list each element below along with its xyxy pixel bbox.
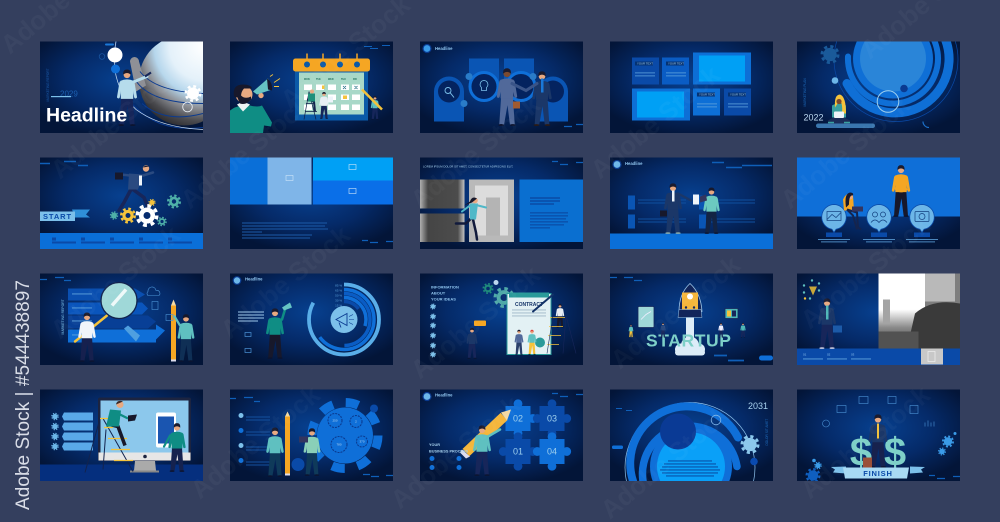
dashes (40, 278, 71, 280)
puzzle numbers (513, 414, 557, 456)
watermarks: Adobe Stock (45, 59, 186, 185)
percent labels: 50 % (335, 294, 342, 298)
card labels: YOUR TEXT (668, 62, 684, 66)
block 2 (268, 158, 312, 204)
circles (438, 72, 564, 107)
slide 13: contract (420, 274, 583, 365)
pencil (171, 300, 176, 362)
bottom band (797, 348, 960, 365)
arrows chart (68, 288, 165, 342)
card labels: YOUR TEXT (730, 92, 746, 96)
band labels: 03 (851, 352, 855, 356)
start banner: START (43, 212, 72, 221)
headline: Headline (625, 161, 643, 166)
puzzle numbers: 01 (513, 446, 523, 456)
blue rings (847, 18, 949, 113)
block 3 (313, 158, 393, 180)
gears (483, 280, 513, 306)
slide 17: gear team (230, 390, 393, 481)
blue circle (111, 64, 120, 74)
calendar (293, 54, 370, 120)
contract document (507, 292, 551, 354)
dashes (364, 46, 390, 48)
card 4 (724, 88, 751, 116)
watermarks: Adobe Stock (405, 89, 546, 215)
big pencil (460, 410, 511, 458)
icon arc (822, 396, 934, 427)
vertical label: MARKETING PLAN (803, 78, 807, 106)
outer thin arc (625, 402, 755, 522)
slide 10: three circles (797, 158, 960, 249)
inner gears (328, 414, 368, 452)
slide 3: infographic handshake (420, 42, 583, 133)
man with megaphone (230, 84, 272, 133)
inner gear labels (332, 418, 365, 446)
street photo (878, 274, 960, 348)
pill (759, 356, 773, 360)
right people (719, 323, 745, 338)
title: YOUR (429, 443, 440, 447)
card labels: YOUR TEXT (699, 92, 715, 96)
runner (115, 165, 153, 210)
pencil (285, 412, 290, 476)
gray tile (921, 348, 943, 364)
floor bar (816, 124, 875, 128)
watermarks: Adobe Stock (595, 399, 736, 522)
caption lines (818, 239, 938, 242)
gears (110, 196, 180, 226)
small ring (99, 54, 105, 59)
band text lines (803, 358, 871, 360)
ladder (85, 418, 133, 472)
building pillar (130, 57, 146, 92)
year: 2022 (804, 112, 824, 122)
start banner (40, 210, 90, 221)
dashes (552, 162, 583, 164)
photo 2 (420, 214, 464, 242)
percent labels: 65 % (335, 288, 342, 292)
floor (40, 464, 203, 481)
people at contract (515, 330, 536, 355)
pill (612, 446, 623, 449)
light dot (832, 77, 838, 84)
percent labels: 15 % (335, 304, 342, 308)
inner gear labels: 370 (359, 440, 365, 444)
watermarks: Adobe Stock (45, 219, 186, 345)
woman with tablet (299, 428, 319, 476)
ribbon: FINISH (863, 469, 893, 478)
vertical label: MARKETING REPORT (46, 68, 50, 102)
headline badge (613, 160, 621, 168)
small icons (245, 332, 251, 352)
thin outer ring (834, 0, 958, 122)
slide 18: puzzle process (420, 390, 583, 481)
column panels (434, 58, 568, 122)
dashes (929, 476, 960, 478)
headline: Headline (245, 276, 263, 282)
watermarks: Adobe Stock (405, 259, 546, 385)
gear (742, 436, 758, 453)
accent dots (292, 404, 378, 471)
top dash (105, 44, 114, 46)
bullet dots (430, 304, 436, 357)
tablet (156, 412, 176, 448)
block 4 (313, 180, 393, 204)
text rows (638, 200, 755, 222)
man on ladder (106, 401, 137, 446)
band labels (803, 352, 855, 356)
band labels: 01 (803, 352, 807, 356)
year: 2031 (748, 401, 768, 411)
white circle (108, 48, 122, 62)
dollar signs (850, 430, 906, 474)
briefcase (863, 458, 872, 468)
vertical label: MARKETING REPORT (61, 299, 65, 334)
watermarks: Adobe Stock (385, 389, 526, 515)
man (819, 298, 842, 349)
calendar: WED (328, 78, 334, 81)
title: BUSINESS PROCESS (429, 450, 469, 454)
woman (174, 314, 193, 362)
inner gear labels: 780 (336, 442, 342, 446)
cloud (675, 318, 705, 356)
slide 1: headline cover (40, 42, 203, 133)
dashes (616, 408, 632, 410)
slide 16: computer monitor (40, 390, 203, 481)
gear (822, 46, 838, 63)
man with sign (467, 320, 486, 359)
percent labels (335, 284, 342, 308)
people on calendar (304, 90, 333, 120)
disk text (660, 460, 720, 476)
calendar: MON (304, 78, 310, 81)
blue top (797, 158, 960, 216)
big gear (312, 402, 378, 468)
headline badge (233, 277, 241, 284)
title (429, 443, 469, 454)
donut center (330, 306, 358, 333)
list lines (246, 416, 270, 466)
magnifier (75, 282, 137, 342)
arrow text lines (72, 294, 92, 335)
slide 15: photo with man (797, 274, 960, 365)
gears right (939, 432, 956, 455)
left people (629, 323, 665, 338)
headline badge (423, 44, 431, 52)
bullet dots (430, 456, 462, 470)
title (431, 284, 459, 302)
person (118, 69, 151, 126)
slide 5: 2022 rings (797, 42, 960, 133)
slide 2: calendar (230, 42, 393, 133)
card labels: YOUR TEXT (637, 62, 653, 66)
seated woman (843, 192, 863, 230)
man (870, 414, 886, 468)
text block (242, 222, 328, 238)
slide 12: donut chart (230, 274, 393, 365)
man (80, 313, 94, 362)
slide 7: colour blocks (230, 158, 393, 249)
rocket (678, 284, 702, 318)
photo 1 (420, 180, 464, 208)
photo frame top (693, 52, 751, 84)
white gear (186, 86, 200, 101)
headline: Headline (46, 104, 127, 126)
slide 19: 2031 rings (610, 390, 773, 481)
card copy lines (635, 72, 748, 107)
two men shaking hands (498, 68, 550, 126)
dot (750, 458, 758, 465)
slide 20: finish (797, 390, 960, 481)
puzzle numbers: 03 (547, 414, 557, 424)
pen (533, 294, 553, 312)
right screen (725, 308, 738, 318)
monitor (98, 398, 191, 472)
card 3 (693, 88, 720, 116)
circle markers (822, 204, 934, 232)
dot (900, 85, 908, 92)
title: YOUR IDEAS (431, 296, 456, 302)
slide 11: marketing report magnifier (40, 274, 203, 365)
watermarks: Adobe Stock (795, 379, 936, 505)
running woman (456, 198, 486, 240)
panel text lines (530, 198, 568, 228)
standing man (893, 165, 909, 217)
gears left (807, 459, 821, 482)
idea icons (803, 279, 820, 300)
ribbon (831, 466, 925, 478)
calendar: TUE (316, 78, 321, 81)
watermarks: Adobe Stock (585, 59, 726, 185)
vertical label: DOLOR SIT AMET (765, 419, 769, 446)
slide 6: start runner (40, 158, 203, 249)
calendar: THU (341, 78, 346, 81)
photo 3 (469, 180, 514, 242)
dark circle (660, 414, 696, 450)
percent labels: 85 % (335, 284, 342, 288)
startup text: STARTUP (646, 330, 732, 350)
dashes (40, 162, 88, 166)
bottom band (40, 233, 203, 249)
dollar signs: $ (850, 430, 872, 474)
card 1 (632, 58, 659, 84)
slide 9: deal (610, 158, 773, 249)
inner gear labels: 2 (355, 420, 357, 424)
photo frame bottom (632, 88, 690, 120)
dashes (712, 162, 772, 168)
slide 4: photo grid (610, 42, 773, 133)
puzzle numbers: 02 (513, 414, 523, 424)
circle icons (827, 212, 929, 222)
block 1 (230, 158, 268, 204)
person with pencil (362, 90, 382, 120)
man with megaphone (267, 302, 292, 359)
list dots (238, 413, 244, 463)
megaphone (253, 74, 280, 94)
man (474, 425, 500, 476)
underline (51, 96, 71, 97)
dashes (552, 394, 583, 396)
blue rings (630, 406, 738, 508)
watermarks: Adobe Stock (775, 89, 916, 215)
year: 2029 (60, 90, 78, 98)
watermarks: Adobe Stock (605, 249, 746, 375)
arc accent (923, 122, 929, 128)
watermarks: Adobe Stock (215, 219, 356, 345)
percent labels: 30 % (335, 298, 342, 302)
watermarks: Adobe Stock (795, 209, 936, 335)
card labels (635, 62, 746, 96)
tags (826, 232, 930, 237)
contract document: CONTRACT (515, 302, 543, 308)
number tags (628, 196, 706, 228)
donut (309, 284, 379, 354)
label list (52, 412, 93, 450)
ring outline (877, 91, 899, 112)
orbit arcs (115, 42, 203, 128)
man and woman (660, 183, 719, 234)
small icons (147, 287, 173, 320)
ring (711, 415, 721, 425)
dollar signs: $ (884, 430, 906, 474)
calendar: FRI (353, 78, 357, 81)
dashes (230, 398, 393, 476)
blue panel (520, 180, 583, 242)
dashes (362, 240, 393, 242)
ring (183, 102, 192, 112)
camera icons (286, 164, 356, 194)
outer white arc (114, 42, 203, 130)
headline: Headline (435, 46, 453, 51)
card 2 (662, 58, 689, 84)
dashes (564, 124, 583, 126)
watermarks: Adobe Stock (175, 89, 316, 215)
slide 8: photos and panel (420, 158, 583, 249)
headline badge (423, 392, 431, 400)
title: INFORMATION (431, 284, 459, 290)
title: ABOUT (431, 290, 446, 296)
headline: Headline (435, 392, 453, 398)
photo circle (139, 36, 229, 126)
watermarks: Adobe Stock (185, 379, 326, 505)
man with tablet (164, 423, 184, 472)
bottom band (610, 234, 773, 249)
puzzle numbers: 04 (547, 446, 557, 456)
inner gear labels: 250 (332, 418, 338, 422)
band items (52, 238, 192, 244)
top dashes (610, 278, 642, 280)
text lines (238, 312, 264, 322)
title text: LOREM IPSUM DOLOR SIT AMET, CONSECTETUR ADIPISCING ELIT, (423, 164, 513, 168)
left tablet (638, 306, 654, 328)
puzzle pieces (499, 399, 571, 471)
dashes (714, 356, 744, 360)
man on ladder (547, 304, 576, 354)
slide 14: startup rocket (610, 274, 773, 365)
band labels: 02 (827, 352, 831, 356)
woman with pencil (268, 428, 282, 477)
stock id label: Adobe Stock | #544438897 (13, 280, 34, 510)
seated woman (828, 94, 850, 124)
